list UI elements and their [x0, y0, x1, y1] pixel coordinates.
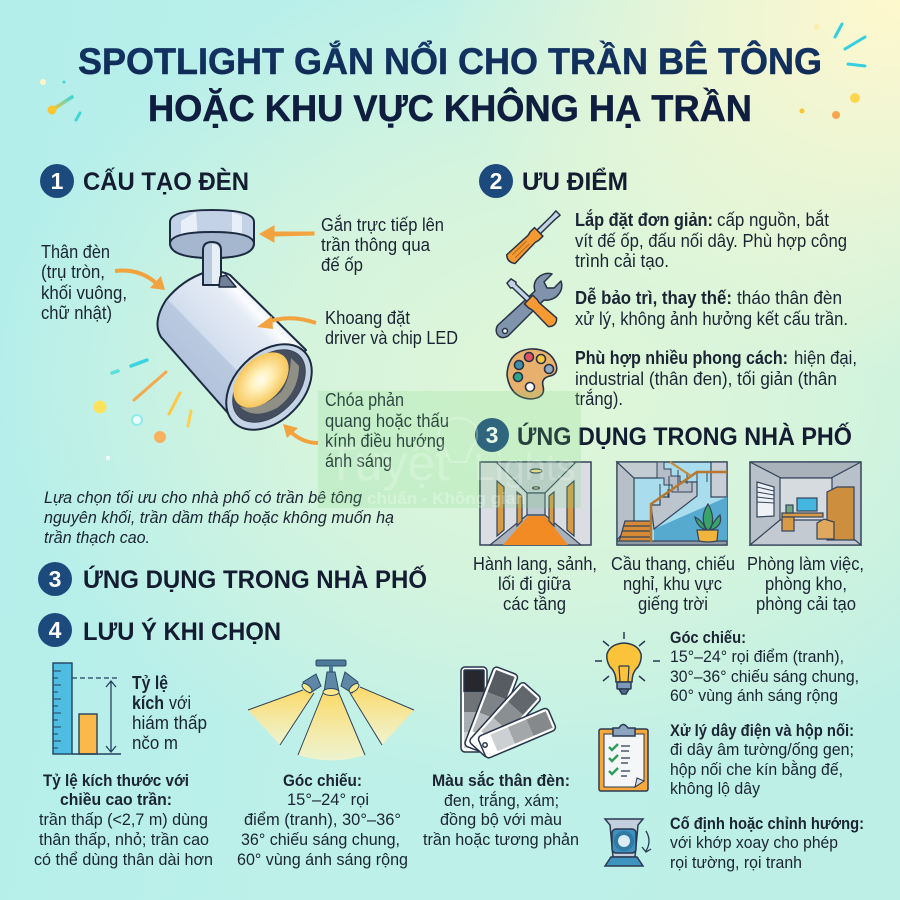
label: thân đèn: (trụ tròn, [41, 262, 105, 282]
caption: màu sắc thân đèn: đen, trắng, xám; [444, 791, 559, 810]
text: xử lý dây điện [670, 721, 854, 798]
text: dễ bảo trì: tháo thân đèn [737, 288, 842, 308]
label: khoang đặt driver [325, 308, 458, 348]
decorative sparkles top left [40, 79, 80, 120]
arrow: body [115, 271, 165, 290]
caption: tỷ lệ kích thước: Tỷ lệ kích thước với [43, 771, 189, 790]
label: chóa phản quang [325, 390, 449, 471]
heading: ứng dụng (left): 3 [49, 566, 61, 592]
panel: cấu tạo đèn [40, 164, 458, 547]
caption: góc chiếu: điểm (tranh), 30°–36° [244, 810, 401, 829]
illustration: hallway [480, 462, 591, 545]
icon: palette [507, 349, 557, 399]
heading: ứng dụng [475, 418, 852, 452]
heading: cấu tạo đèn [40, 164, 249, 198]
illustration: three beams [248, 660, 414, 760]
text: xử lý dây điện: Xử lý dây điện và hộp nối: [670, 721, 854, 740]
icon: screwdriver [505, 209, 562, 265]
italic note [44, 488, 394, 547]
text: lắp đặt đơn giản: trình cải tạo. [575, 251, 669, 271]
icon: clipboard checklist [599, 724, 648, 791]
heading: lưu ý: LƯU Ý KHI CHỌN [83, 616, 281, 646]
chart: ceiling height ratio: hiám thấp [132, 713, 207, 733]
panel: ứng dụng trong nhà phố (right) [473, 418, 864, 614]
text: phù hợp nhiều phong cách: trắng). [575, 388, 623, 409]
label: chóa phản quang: ánh sáng [325, 451, 392, 471]
text: cố định hoặc chỉnh hướng: rọi tường, rọi tranh [670, 853, 802, 872]
label: chóa phản quang: Chóa phản [325, 390, 404, 410]
caption: hallway: Hành lang, sảnh, [473, 554, 597, 574]
text: góc chiếu detail: 30°–36° chiếu sáng chung, [670, 667, 859, 686]
italic note: trần thạch cao. [44, 528, 150, 547]
text: phù hợp nhiều phong cách: hiện đại, [794, 348, 857, 368]
caption: staircase [611, 554, 735, 614]
caption: tỷ lệ kích thước: trần thấp (<2,7 m) dùng [39, 810, 208, 829]
icon: spotlight lamp [157, 210, 328, 446]
caption: staircase: giếng trời [638, 594, 708, 614]
text: cố định hoặc chỉnh hướng [670, 814, 864, 872]
caption: tỷ lệ kích thước: có thể dùng thân dài hơn [34, 850, 213, 869]
icon: light bulb [595, 632, 660, 694]
watermark: Tuyệt [326, 435, 449, 491]
heading: lưu ý: 4 [49, 617, 62, 643]
icon: colour swatch fan [461, 666, 557, 759]
caption: office: Phòng làm việc, [747, 554, 864, 574]
chart: ceiling height ratio: nčo m [132, 733, 178, 753]
panel: ưu điểm [479, 164, 857, 409]
heading: lưu ý [38, 613, 281, 647]
caption: góc chiếu: 60° vùng ánh sáng rộng [237, 850, 408, 869]
heading: ứng dụng: ỨNG DỤNG TRONG NHÀ PHỐ [517, 421, 852, 451]
panel: lưu ý khi chọn [34, 613, 864, 872]
caption: màu sắc thân đèn [423, 771, 579, 849]
caption: hallway [473, 554, 597, 614]
caption: góc chiếu [237, 771, 408, 869]
chart: ceiling height ratio: với [169, 693, 191, 713]
label: thân đèn [41, 242, 127, 323]
label: đế ốp: Gắn trực tiếp lên [321, 214, 444, 235]
heading: ứng dụng (left): ỨNG DỤNG TRONG NHÀ PHỐ [83, 564, 427, 594]
caption: hallway: lối đi giữa [498, 574, 572, 594]
italic note: nguyên khối, trần dầm thấp hoặc không muốn hạ [44, 508, 394, 527]
heading: ứng dụng: 3 [486, 422, 498, 448]
caption: tỷ lệ kích thước [34, 771, 213, 869]
icon: wrench and screwdriver [496, 273, 562, 338]
text: góc chiếu detail: 60° vùng ánh sáng rộng [670, 686, 838, 705]
text: lắp đặt đơn giản: cấp nguồn, bắt [717, 209, 829, 230]
decorative sparkles top right [800, 24, 865, 119]
text: dễ bảo trì [575, 287, 848, 329]
label: khoang đặt driver: driver và chip LED [325, 328, 458, 348]
label: thân đèn: Thân đèn [41, 242, 110, 262]
text: xử lý dây điện: đi dây âm tường/ống gen; [670, 740, 854, 759]
caption: office: phòng kho, [765, 574, 847, 594]
caption: office: phòng cải tạo [756, 594, 856, 614]
heading: cấu tạo đèn: 1 [51, 168, 64, 194]
caption: tỷ lệ kích thước: chiều cao trần: [60, 790, 172, 809]
arrow: reflector [283, 424, 318, 443]
text: phù hợp nhiều phong cách [575, 348, 857, 409]
label: chóa phản quang: quang hoặc thấu [325, 411, 449, 431]
text: góc chiếu detail: Góc chiếu: [670, 628, 746, 647]
caption: góc chiếu: 15°–24° rọi [287, 790, 369, 809]
text: cố định hoặc chỉnh hướng: với khớp xoay cho phép [670, 833, 838, 852]
watermark: Lights [474, 447, 575, 489]
text: xử lý dây điện: không lộ dây [670, 779, 760, 798]
text: lắp đặt đơn giản: Lắp đặt đơn giản: [575, 209, 713, 230]
arrow: mounting base [260, 226, 314, 242]
text: lắp đặt đơn giản [575, 209, 847, 271]
chart: ceiling height ratio [53, 663, 207, 754]
caption: góc chiếu: 36° chiếu sáng chung, [241, 830, 400, 849]
heading: ưu điểm: 2 [490, 168, 502, 194]
text: góc chiếu detail: 15°–24° rọi điểm (tranh), [670, 647, 844, 666]
italic note: Lựa chọn tối ưu cho nhà phố có trần bê tông [44, 488, 363, 507]
heading: cấu tạo đèn: CẤU TẠO ĐÈN [83, 167, 249, 196]
heading: ưu điểm: ƯU ĐIỂM [522, 167, 628, 196]
text: dễ bảo trì: Dễ bảo trì, thay thế: [575, 287, 732, 308]
chart: ceiling height ratio: kích [132, 693, 164, 713]
caption: staircase: Cầu thang, chiếu [611, 554, 735, 574]
chart: ceiling height ratio: Tỷ lệ [132, 673, 168, 693]
caption: hallway: các tầng [503, 594, 566, 614]
arrow: driver compartment [257, 316, 316, 329]
text: phù hợp nhiều phong cách: industrial (thân đen), tối giản (thân [575, 369, 837, 389]
title [78, 39, 822, 129]
text: cố định hoặc chỉnh hướng: Cố định hoặc chỉnh hướng: [670, 814, 864, 833]
watermark [318, 391, 581, 508]
label: chóa phản quang: kính điều hướng [325, 431, 445, 451]
label: đế ốp: đế ốp [321, 255, 363, 275]
caption: màu sắc thân đèn: Màu sắc thân đèn: [432, 771, 570, 790]
text: dễ bảo trì: xử lý, không ảnh hưởng kết cấu trần. [575, 309, 848, 329]
caption: tỷ lệ kích thước: thân thấp, nhỏ; trần cao [39, 830, 209, 849]
text: xử lý dây điện: hộp nối che kín bằng đế, [670, 760, 843, 779]
sparkles under lamp [94, 360, 191, 460]
label: khoang đặt driver: Khoang đặt [325, 308, 410, 328]
text: góc chiếu detail [670, 628, 859, 705]
label: đế ốp [321, 214, 444, 275]
caption: màu sắc thân đèn: trần hoặc tương phản [423, 830, 579, 849]
label: thân đèn: chữ nhật) [41, 303, 112, 323]
caption: office [747, 554, 864, 614]
caption: màu sắc thân đèn: đồng bộ với màu [440, 810, 562, 829]
text: lắp đặt đơn giản: vít đế ốp, đấu nối dây. Phù hợp công [575, 231, 847, 251]
icon: rotating joint [605, 819, 651, 866]
text: phù hợp nhiều phong cách: Phù hợp nhiều phong cách: [575, 348, 788, 368]
label: thân đèn: khối vuông, [41, 283, 127, 303]
illustration: staircase [617, 462, 727, 545]
title: HOẶC KHU VỰC KHÔNG HẠ TRẦN [148, 87, 752, 129]
label: đế ốp: trần thông qua [321, 235, 431, 255]
title: SPOTLIGHT GẮN NỔI CHO TRẦN BÊ TÔNG [78, 39, 822, 82]
caption: staircase: nghỉ, khu vực [623, 574, 722, 594]
watermark: chuẩn - Không gian [367, 489, 526, 508]
caption: góc chiếu: Góc chiếu: [283, 771, 362, 790]
illustration: office [750, 462, 861, 545]
heading: ưu điểm [479, 164, 628, 198]
